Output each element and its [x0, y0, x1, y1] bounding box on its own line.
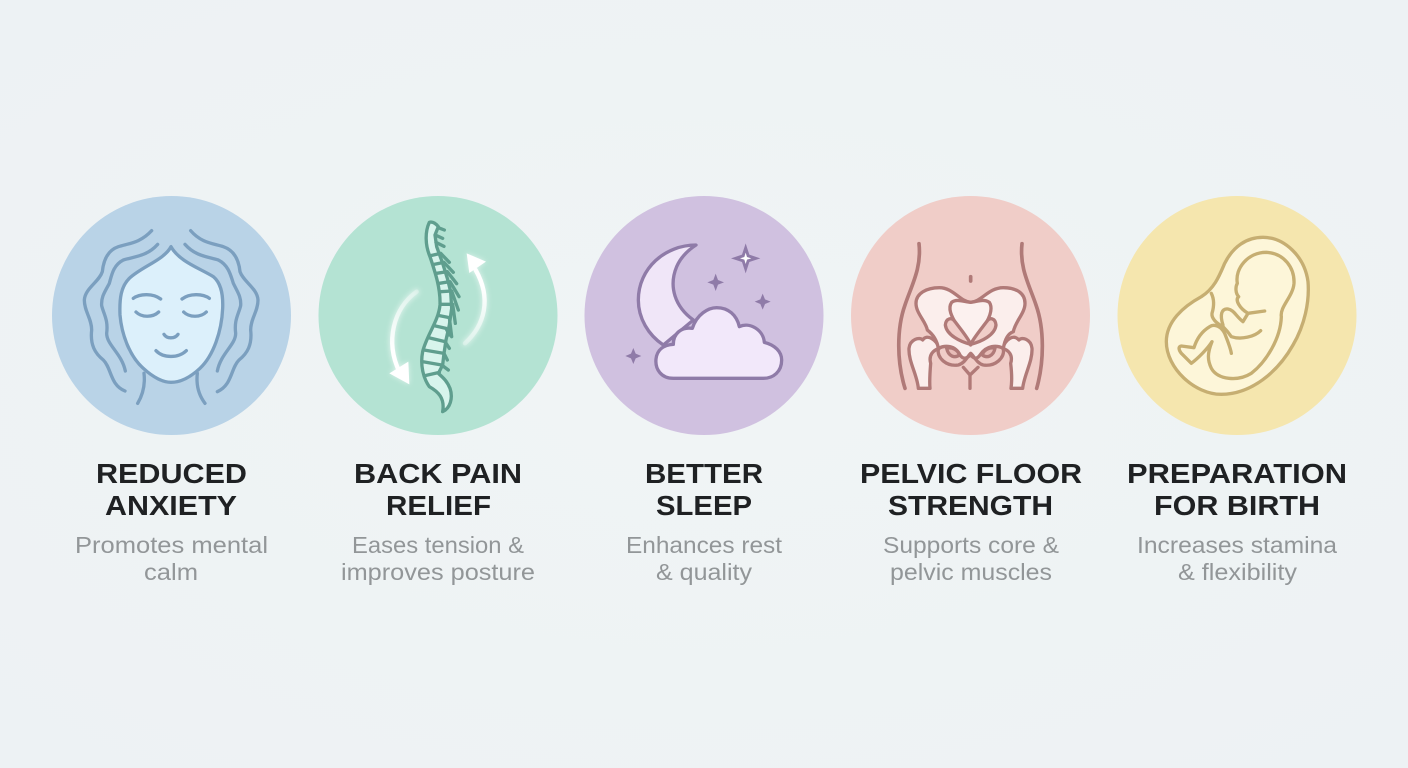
description: pelvic floor strength: Supports core & [883, 532, 1059, 558]
icon: fetus in womb [1118, 196, 1356, 435]
description: better sleep [626, 532, 783, 585]
ilium [916, 288, 1025, 358]
stars [625, 243, 771, 364]
heading: preparation for birth: FOR BIRTH [1154, 490, 1320, 521]
description: back pain relief: improves posture [341, 559, 535, 585]
benefit: reduced anxiety [52, 196, 291, 585]
moon [638, 245, 696, 345]
womb [1166, 237, 1308, 394]
description: better sleep: Enhances rest [626, 532, 783, 558]
fetus [1179, 252, 1294, 379]
sacrum [950, 300, 991, 345]
benefit: pelvic floor strength [851, 196, 1090, 585]
description: reduced anxiety [75, 532, 268, 585]
heading: pelvic floor strength: STRENGTH [888, 490, 1053, 521]
benefit: preparation for birth [1118, 196, 1356, 585]
heading: better sleep: SLEEP [656, 490, 752, 521]
description: back pain relief [341, 532, 535, 585]
icon: moon, cloud and stars [584, 196, 824, 435]
arrow: upward [465, 253, 486, 343]
heading: reduced anxiety: REDUCED [96, 458, 247, 489]
icon: pelvis [851, 196, 1090, 435]
description: reduced anxiety: Promotes mental [75, 532, 268, 558]
pubic arch [938, 348, 1004, 365]
description: preparation for birth: Increases stamina [1137, 532, 1337, 558]
description: back pain relief: Eases tension & [352, 532, 524, 558]
heading: reduced anxiety: ANXIETY [105, 490, 237, 521]
benefit: back pain relief [318, 196, 558, 585]
description: pelvic floor strength: pelvic muscles [890, 559, 1052, 585]
heading: preparation for birth: PREPARATION [1127, 458, 1347, 489]
benefit: better sleep [584, 196, 824, 585]
description: reduced anxiety: calm [144, 559, 198, 585]
cloud [656, 308, 782, 378]
icon: calm face [52, 196, 291, 435]
heading: better sleep [645, 458, 763, 521]
heading: pelvic floor strength: PELVIC FLOOR [860, 458, 1082, 489]
icon: spine with arrows [318, 196, 558, 435]
hips outline [899, 244, 919, 388]
description: preparation for birth [1137, 532, 1337, 585]
femurs [909, 337, 939, 388]
heading: back pain relief: RELIEF [386, 490, 491, 521]
description: better sleep: & quality [656, 559, 753, 585]
heading: preparation for birth [1127, 458, 1347, 521]
heading: back pain relief: BACK PAIN [354, 458, 522, 489]
heading: back pain relief [354, 458, 522, 521]
description: preparation for birth: & flexibility [1178, 559, 1298, 585]
heading: better sleep: BETTER [645, 458, 763, 489]
description: pelvic floor strength [883, 532, 1059, 585]
arrow: downward [389, 292, 417, 384]
spine [422, 222, 459, 412]
heading: pelvic floor strength [860, 458, 1082, 521]
heading: reduced anxiety [96, 458, 247, 521]
